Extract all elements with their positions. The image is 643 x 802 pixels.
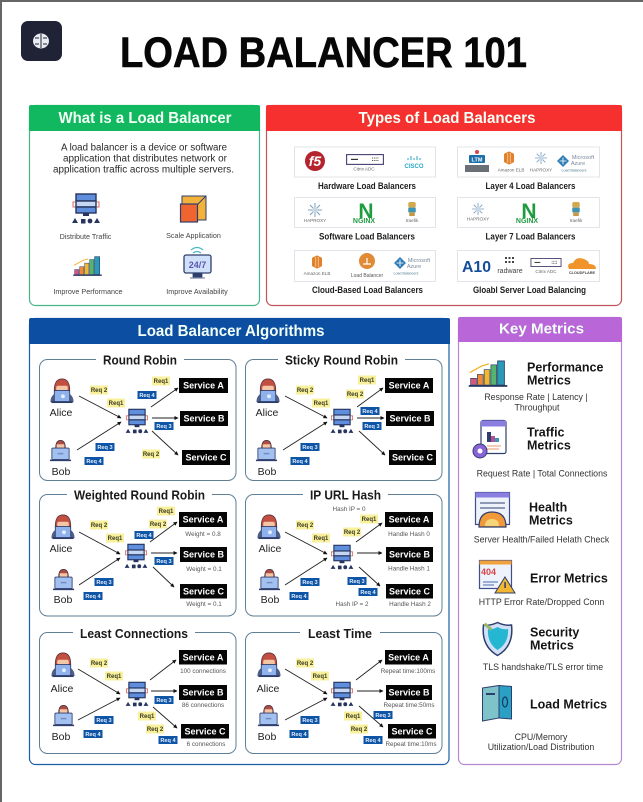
- request tags: Req 4: [85, 732, 102, 738]
- hash A: Handle Hash 0: [388, 531, 430, 538]
- service B: [386, 685, 432, 700]
- subheading: Sticky Round Robin: [285, 354, 398, 368]
- service B: [180, 411, 228, 426]
- person: alice: [256, 379, 280, 403]
- person: bob: [256, 440, 277, 461]
- subheading: IP URL Hash: [310, 488, 381, 502]
- algorithm: sticky round robin: [246, 354, 442, 480]
- label: improve availability: Improve Availability: [166, 287, 228, 296]
- weight C: Weight = 0.1: [186, 601, 222, 608]
- request tags: Req 3: [96, 580, 112, 586]
- name: Alice: [259, 543, 282, 555]
- request tags: Req1: [314, 536, 329, 542]
- load balancer icon: [331, 409, 353, 433]
- icon: improve performance: [73, 257, 102, 276]
- card: layer 4 logos: [465, 150, 595, 172]
- name: Alice: [257, 683, 280, 695]
- algorithm: round robin: [40, 354, 236, 480]
- service B: Service B: [388, 688, 430, 698]
- request tags: Req 3: [349, 579, 365, 585]
- service B: Service B: [183, 414, 225, 424]
- arrows: [285, 660, 383, 727]
- detail: load: CPU/Memory: [515, 732, 568, 742]
- card: layer 4 logos: Microsoft: [572, 155, 595, 161]
- request tags: Req 3: [302, 718, 318, 724]
- service B: [386, 411, 434, 426]
- subheading: Round Robin: [103, 354, 177, 368]
- request tags: Req 3: [302, 445, 318, 451]
- subheading: Least Time: [308, 627, 372, 641]
- card: global logos: [462, 258, 596, 276]
- request tags: Req1: [362, 517, 377, 523]
- hash B: Handle Hash 1: [388, 566, 430, 572]
- person: bob: [258, 705, 279, 726]
- service A: Service A: [389, 514, 430, 524]
- icon: load: [482, 686, 512, 721]
- detail: load: Utilization/Load Distribution: [488, 742, 594, 752]
- request tags: Req 4: [362, 409, 379, 415]
- hash C: Handle Hash 2: [389, 601, 431, 608]
- card: global logos: CLOUDFLARE: [569, 271, 596, 275]
- service C: Service C: [389, 586, 431, 596]
- caption: software: Software Load Balancers: [319, 232, 415, 242]
- service A: Service A: [388, 652, 429, 662]
- name: Bob: [54, 594, 72, 606]
- request tags: Req1: [314, 401, 329, 407]
- load balancer icon: [331, 545, 353, 569]
- caption: layer 4: Layer 4 Load Balancers: [486, 181, 576, 191]
- definition text: [53, 142, 234, 176]
- request tags: Req 3: [375, 713, 391, 719]
- card: hardware logos: CISCO: [404, 164, 424, 170]
- service B: [179, 685, 227, 700]
- name: Alice: [51, 683, 74, 695]
- service A: Service A: [183, 514, 224, 524]
- card backgrounds: [294, 147, 600, 282]
- card: layer 4 logos: HAPROXY: [530, 168, 552, 172]
- card: cloud logos: Azure: [407, 264, 421, 270]
- load balancer icon: [125, 544, 147, 568]
- card: cloud logos: [304, 253, 431, 279]
- service C: [181, 724, 229, 738]
- request tags: Req1: [107, 674, 122, 680]
- card: software logos: traefik: [406, 218, 419, 223]
- panel: load balancer algorithms: [29, 318, 450, 764]
- card: layer 7 logos: traefik: [570, 218, 583, 223]
- panel: key metrics: [458, 317, 622, 764]
- name: Bob: [258, 466, 276, 478]
- icon: performance: [469, 361, 507, 387]
- detail: error: HTTP Error Rate/Dropped Conn: [479, 597, 604, 607]
- heading: traffic: Traffic: [527, 426, 565, 440]
- service A: [385, 650, 432, 664]
- card: layer 7 logos: NGINX: [516, 218, 538, 225]
- title: LOAD BALANCER 101: [120, 29, 527, 77]
- algorithm: least time: [246, 627, 442, 754]
- icon: improve availability: 24/7: [189, 260, 206, 270]
- detail: security: TLS handshake/TLS error time: [483, 662, 603, 672]
- panel heading: What is a Load Balancer: [58, 110, 232, 127]
- repeat time A: Repeat time:100ms: [381, 668, 435, 675]
- definition text: application traffic across multiple servers.: [53, 164, 234, 176]
- service A: [385, 378, 433, 393]
- person: bob: [259, 569, 280, 590]
- icon: brain logo: [21, 21, 62, 61]
- hash note bottom: Hash IP = 2: [336, 601, 369, 608]
- name: Bob: [258, 731, 276, 743]
- heading: performance: Metrics: [527, 374, 571, 388]
- heading: health: Metrics: [529, 514, 573, 528]
- algorithm: ip url hash: [246, 488, 442, 616]
- card: cloud logos: Load Balancers: [394, 272, 419, 276]
- weight B: Weight = 0.1: [186, 566, 222, 573]
- request tags: Req1: [360, 378, 375, 384]
- algorithm: least connections: [40, 627, 236, 754]
- label: scale application: Scale Application: [166, 231, 221, 240]
- card: software logos: NGINX: [353, 218, 375, 225]
- caption: global server: Gloabl Server Load Balancing: [473, 285, 586, 295]
- request tags: Req 4: [291, 594, 308, 600]
- heading: security: Security: [530, 626, 579, 640]
- service B: [180, 547, 227, 562]
- service C: [389, 450, 436, 465]
- request tags: Req 4: [292, 459, 309, 465]
- arrows: [78, 660, 177, 728]
- person: alice: [50, 379, 74, 403]
- icon: security: [483, 622, 512, 656]
- detail: health: Server Health/Failed Helath Check: [474, 534, 610, 544]
- hash note top: Hash IP = 0: [333, 506, 366, 513]
- service C: [386, 584, 433, 598]
- card: layer 7 logos: HAPROXY: [467, 216, 489, 222]
- request tags: Req1: [108, 536, 123, 542]
- name: Bob: [261, 594, 279, 606]
- detail: performance: Throughput: [514, 402, 560, 412]
- request tags: Req 4: [160, 738, 177, 744]
- service B: Service B: [183, 550, 225, 560]
- service A: Service A: [389, 380, 430, 390]
- panel header: [266, 105, 622, 131]
- heading: error: Error Metrics: [530, 572, 608, 586]
- detail: traffic: Request Rate | Total Connections: [477, 468, 608, 478]
- service A: Service A: [183, 652, 224, 662]
- panel heading: Key Metrics: [499, 320, 584, 338]
- request tags: [290, 658, 392, 744]
- request tags: Req 4: [139, 393, 156, 399]
- request tags: Req 3: [302, 580, 318, 586]
- name: Bob: [52, 466, 70, 478]
- request tags: [84, 376, 174, 465]
- service C: Service C: [391, 726, 433, 736]
- card: global logos: Citrix ADC: [535, 269, 557, 274]
- request tags: [290, 514, 378, 600]
- service B: Service B: [182, 688, 224, 698]
- service B: [386, 547, 433, 562]
- request tags: Req 2: [351, 727, 368, 733]
- person: bob: [53, 569, 74, 590]
- service C: Service C: [183, 586, 225, 596]
- label: distribute traffic: Distribute Traffic: [60, 232, 112, 241]
- person: alice: [51, 515, 75, 539]
- request tags: [290, 376, 382, 465]
- panel heading: Load Balancer Algorithms: [138, 323, 325, 340]
- request tags: Req 2: [297, 661, 314, 667]
- icon: error: [480, 560, 515, 593]
- service C: Service C: [392, 452, 434, 462]
- service B: Service B: [389, 550, 431, 560]
- service C: Service C: [184, 726, 226, 736]
- person: bob: [50, 440, 71, 461]
- request tags: Req 4: [291, 732, 308, 738]
- request tags: Req 2: [91, 661, 108, 667]
- repeat time C: Repeat time:10ms: [385, 741, 437, 748]
- heading: performance: Performance: [527, 360, 603, 374]
- heading: security: Metrics: [530, 638, 574, 652]
- request tags: Req1: [313, 674, 328, 680]
- request tags: Req 4: [365, 738, 382, 744]
- card: software logos: N: [358, 200, 374, 223]
- connections A: 100 connections: [180, 668, 226, 675]
- panel heading: Types of Load Balancers: [358, 110, 536, 127]
- service B: Service B: [389, 414, 431, 424]
- card: cloud logos: Amazon ELB: [304, 271, 330, 276]
- request tags: Req 2: [297, 523, 314, 529]
- request tags: Req1: [154, 379, 169, 385]
- algorithm: weighted round robin: [40, 488, 236, 616]
- card: hardware logos: f5: [309, 153, 321, 169]
- arrows: [283, 388, 385, 455]
- request tags: Req1: [109, 401, 124, 407]
- request tags: Req 3: [156, 424, 172, 430]
- definition text: application that distributes network or: [63, 154, 228, 164]
- service A: [179, 378, 228, 393]
- person: alice: [51, 653, 75, 677]
- card: layer 4 logos: Azure: [571, 161, 585, 167]
- caption: cloud-based: Cloud-Based Load Balancers: [312, 285, 423, 295]
- request tags: Req 2: [344, 530, 361, 536]
- request tags: Req 3: [96, 718, 112, 724]
- name: Alice: [50, 543, 73, 555]
- card: global logos: radware: [497, 268, 523, 275]
- arrows: [77, 388, 178, 455]
- connections B: 86 connections: [182, 702, 224, 709]
- request tags: Req 2: [347, 392, 364, 398]
- load balancer icon: [331, 682, 353, 706]
- service A: Service A: [183, 380, 224, 390]
- heading: health: Health: [529, 500, 567, 514]
- request tags: Req 4: [86, 459, 103, 465]
- panel: types of load balancers: [266, 105, 622, 306]
- name: Alice: [256, 407, 279, 419]
- connections C: 6 connections: [187, 741, 225, 748]
- load balancer icon: [126, 409, 148, 433]
- request tags: Req 4: [85, 594, 102, 600]
- panel header: [458, 317, 622, 342]
- icon: improve availability: [184, 248, 211, 278]
- request tags: Req1: [346, 714, 361, 720]
- service C: [182, 450, 230, 465]
- person: alice: [257, 515, 281, 539]
- card: layer 7 logos: [467, 200, 583, 225]
- caption: hardware: Hardware Load Balancers: [318, 181, 416, 191]
- service A: [385, 512, 433, 527]
- person: alice: [257, 653, 281, 677]
- name: Bob: [52, 731, 70, 743]
- card: hardware logos: [305, 151, 424, 172]
- request tags: Req1: [140, 714, 155, 720]
- request tags: Req 3: [97, 445, 113, 451]
- request tags: Req 2: [143, 452, 160, 458]
- request tags: [84, 658, 178, 744]
- card: software logos: HAPROXY: [304, 218, 326, 223]
- arrows: [285, 523, 382, 586]
- request tags: Req 2: [147, 727, 164, 733]
- request tags: [84, 506, 175, 600]
- card: layer 7 logos: N: [521, 200, 537, 223]
- service C: [180, 584, 227, 598]
- icon: traffic: [473, 420, 506, 458]
- card: software logos: [304, 200, 419, 225]
- load balancer icon: [126, 682, 148, 706]
- detail: performance: Response Rate | Latency |: [484, 392, 588, 402]
- heading: load: Load Metrics: [530, 698, 607, 712]
- icon: error: 404: [481, 567, 496, 577]
- card: global logos: A10: [462, 259, 491, 276]
- definition text: A load balancer is a device or software: [61, 142, 227, 154]
- service A: [179, 650, 227, 664]
- card: cloud logos: Microsoft: [408, 258, 431, 264]
- icon: scale application: [180, 196, 206, 222]
- request tags: Req 2: [91, 388, 108, 394]
- request tags: Req 3: [364, 424, 380, 430]
- service C: [388, 724, 436, 738]
- card: cloud logos: Load Balancer: [351, 273, 383, 279]
- subheading: Weighted Round Robin: [74, 488, 205, 502]
- panel: what is a load balancer: [29, 105, 260, 306]
- subheading: Least Connections: [80, 627, 188, 641]
- request tags: Req 2: [297, 388, 314, 394]
- caption: layer 7: Layer 7 Load Balancers: [486, 232, 576, 242]
- repeat time B: Repeat time:50ms: [383, 702, 435, 709]
- card: hardware logos: Citrix ADC: [353, 166, 375, 172]
- label: improve performance: Improve Performance: [53, 287, 123, 296]
- service A: [179, 512, 227, 527]
- panel header: [29, 105, 260, 131]
- request tags: Req 4: [360, 590, 377, 596]
- arrows: [79, 522, 177, 587]
- card: layer 4 logos: Load Balancers: [562, 168, 587, 172]
- card: layer 4 logos: Amazon ELB: [498, 168, 524, 172]
- request tags: Req1: [159, 509, 174, 515]
- request tags: Req 4: [136, 533, 153, 539]
- panel header: [29, 318, 450, 344]
- request tags: Req 3: [156, 698, 172, 704]
- weight A: Weight = 0.8: [185, 531, 221, 538]
- request tags: Req 2: [91, 523, 108, 529]
- card: layer 4 logos: LTM: [472, 158, 483, 164]
- request tags: Req 2: [150, 522, 167, 528]
- service C: Service C: [185, 452, 227, 462]
- heading: traffic: Metrics: [527, 438, 571, 452]
- person: bob: [53, 705, 74, 726]
- name: Alice: [50, 407, 73, 419]
- icon: health: [476, 492, 510, 527]
- icon: distribute traffic: [72, 194, 100, 224]
- request tags: Req 3: [156, 559, 172, 565]
